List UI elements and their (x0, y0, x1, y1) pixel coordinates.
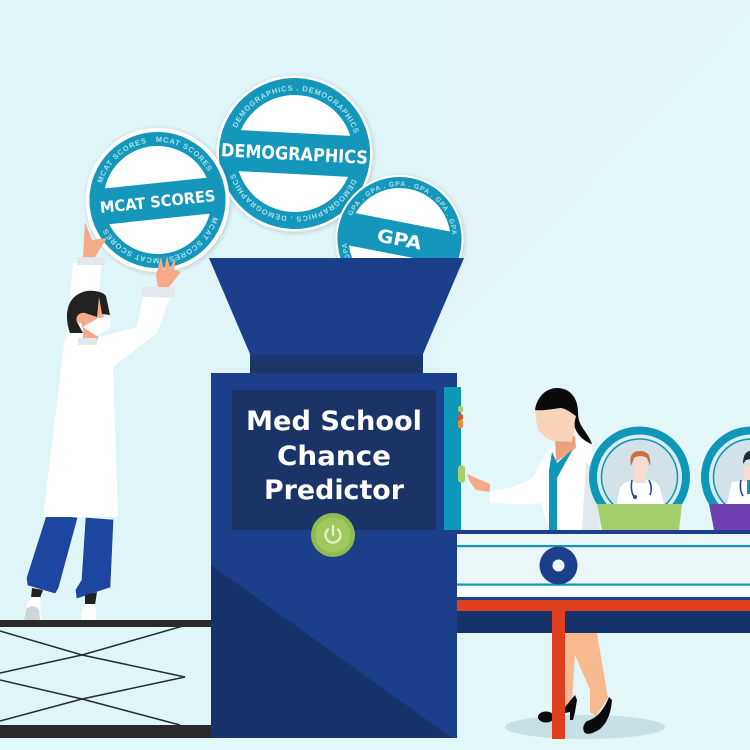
badge: MCAT scores: MCAT SCORES MCAT SCORES (97, 136, 212, 183)
badge: demographics: DEMOGRAPHICS . DEMOGRAPHICS (230, 174, 357, 222)
badge: GPA: GPA (375, 225, 423, 255)
badge: MCAT scores: MCAT SCORES (99, 187, 216, 217)
lab coat (43, 263, 170, 517)
conveyor wheel (540, 546, 578, 584)
coat shading (582, 462, 600, 530)
scrubs (549, 449, 573, 530)
conveyor top rail (457, 530, 750, 534)
scientist holding badge (24, 222, 181, 620)
badge: GPA: GPA . GPA . GPA . GPA . GPA . GPA (348, 181, 457, 235)
coat (490, 437, 600, 530)
candidate pod 1 (593, 430, 686, 530)
nurse legs and heels (538, 633, 612, 734)
hair (535, 388, 592, 444)
badge: demographics: DEMOGRAPHICS . DEMOGRAPHICS (232, 85, 359, 133)
machine screen with title: Predictor (264, 475, 405, 506)
machine screen with title (232, 390, 436, 530)
scissor lift platform (0, 620, 211, 738)
hand (467, 474, 490, 492)
badge: GPA (334, 174, 466, 272)
hands (83, 222, 181, 288)
machine screen with title: Chance (277, 441, 391, 472)
doctor (617, 451, 664, 504)
machine door and controls (444, 387, 465, 530)
coat cuffs (77, 257, 175, 297)
floor shadow (505, 715, 665, 739)
head (67, 291, 110, 345)
machine body (211, 373, 457, 738)
badge: GPA: GPA . GPA . GPA . GPA . GPA . GPA (342, 243, 350, 258)
candidate pod 2 (705, 430, 750, 530)
badge: MCAT scores: MCAT SCORES MCAT SCORES (103, 217, 218, 264)
machine screen with title: Med School (246, 406, 422, 437)
conveyor belt (457, 532, 750, 633)
nurse pressing button (467, 388, 600, 530)
socks and shoes (24, 588, 97, 620)
hopper neck (250, 354, 423, 374)
badge: MCAT scores (84, 126, 233, 275)
neck (555, 436, 576, 462)
badge: demographics: DEMOGRAPHICS (220, 140, 368, 169)
doctor (727, 451, 750, 504)
badge: demographics (215, 74, 376, 235)
trousers (27, 515, 113, 598)
power button (311, 513, 355, 557)
conveyor red post (552, 605, 565, 739)
hopper funnel (209, 258, 464, 354)
face (535, 405, 577, 442)
